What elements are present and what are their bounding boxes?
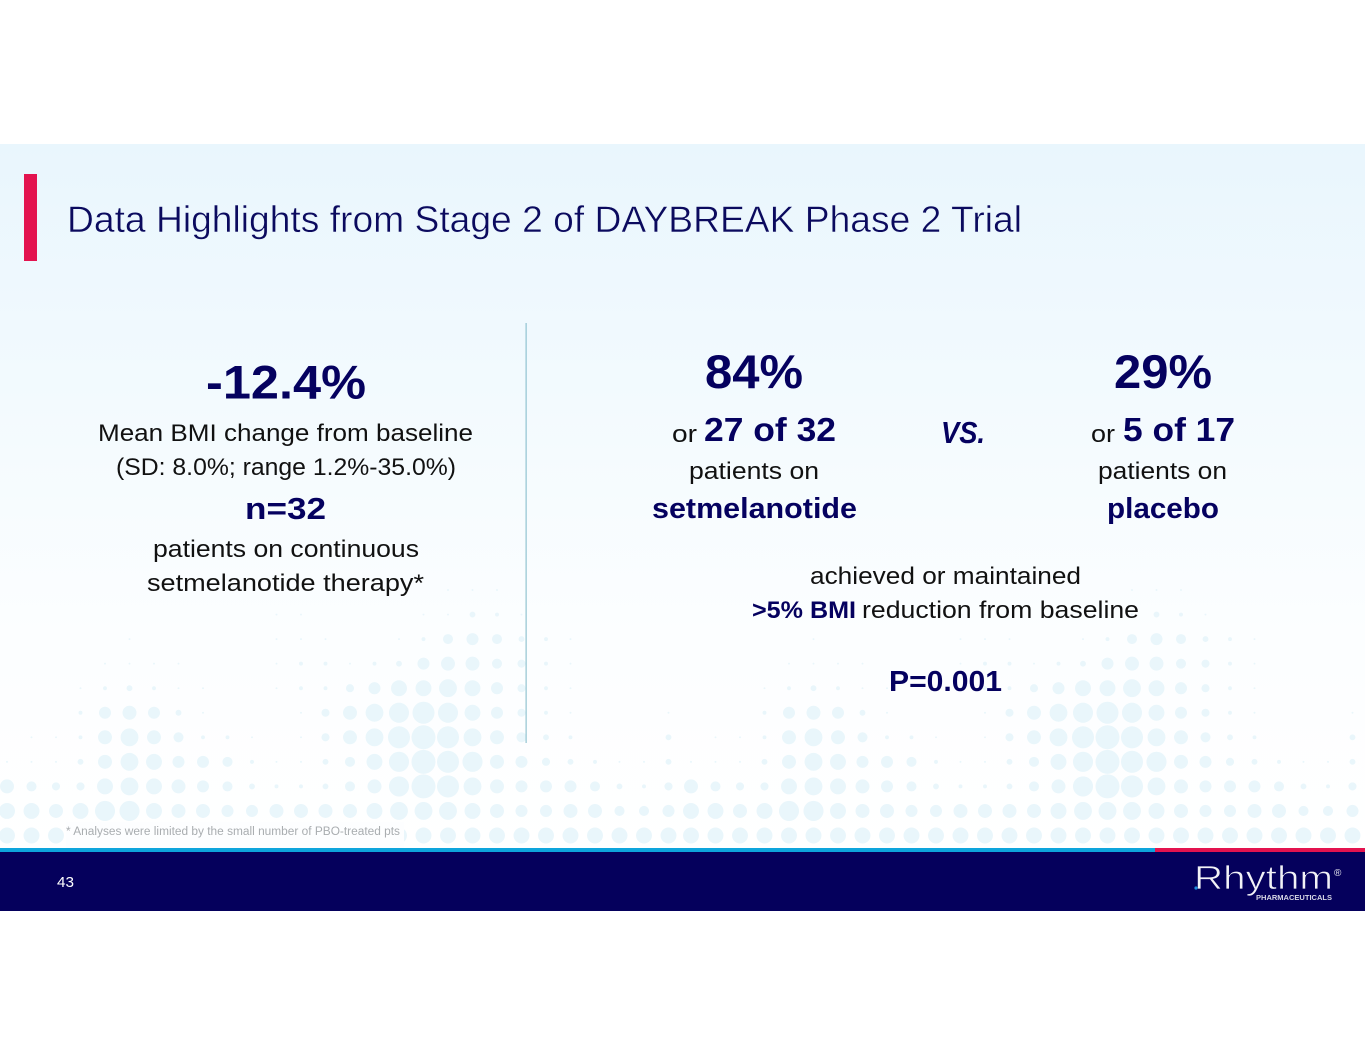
accent bar [24, 174, 37, 261]
dot pattern left [7, 590, 668, 836]
text: setmelanotide therapy: setmelanotide therapy* [147, 570, 424, 597]
stat: 29%: 29% [1114, 345, 1212, 398]
text: patients on continuous: patients on continuous [153, 536, 419, 563]
footer bar [0, 848, 1365, 911]
text: or placebo: or [1091, 421, 1115, 448]
panel: placebo responders [1091, 345, 1235, 525]
text: SD and range: (SD: 8.0%; range 1.2%-35.0%) [116, 454, 456, 481]
panel: setmelanotide responders [652, 345, 857, 525]
label: versus: VS. [941, 415, 985, 450]
title: Data Highlights from Stage 2 of DAYBREAK Phase 2 Trial [67, 199, 1022, 240]
text: mean BMI description: Mean BMI change from baseline [98, 420, 473, 447]
stat: 84%: 84% [705, 345, 803, 398]
logo: Rhythm Pharmaceuticals: Rhythm [1194, 859, 1333, 896]
footnote: * Analyses were limited by the small number of PBO-treated pts [66, 826, 400, 838]
logo: Rhythm Pharmaceuticals: ® [1334, 868, 1342, 879]
text: or: or [672, 421, 697, 448]
text: BMI reduction [752, 597, 1139, 624]
text: patients on placebo: patients on [1098, 458, 1227, 485]
stat: 27 of 32: 27 of 32 [704, 411, 836, 448]
label: setmelanotide: setmelanotide [652, 493, 857, 525]
stat: 5 of 17: 5 of 17 [1123, 411, 1235, 448]
panel background [0, 144, 1365, 850]
stat: p value: P=0.001 [889, 666, 1002, 698]
stat: mean BMI change: -12.4% [206, 356, 366, 408]
logo: Rhythm Pharmaceuticals [1194, 859, 1342, 902]
stat: n=32: n=32 [245, 491, 326, 526]
panel: mean BMI change [98, 356, 473, 597]
text: patients on: patients on [689, 458, 819, 485]
divider [526, 323, 527, 743]
dot pattern right [691, 590, 1352, 836]
footnote [66, 822, 404, 848]
text: BMI reduction: reduction from baseline [862, 597, 1139, 624]
logo: Rhythm Pharmaceuticals: PHARMACEUTICALS [1256, 895, 1332, 902]
text: achieved or maintained: achieved or maintained [810, 563, 1081, 590]
label: placebo: placebo [1107, 493, 1219, 525]
text: BMI reduction: >5% BMI [752, 597, 856, 624]
page number: 43 [57, 874, 74, 891]
